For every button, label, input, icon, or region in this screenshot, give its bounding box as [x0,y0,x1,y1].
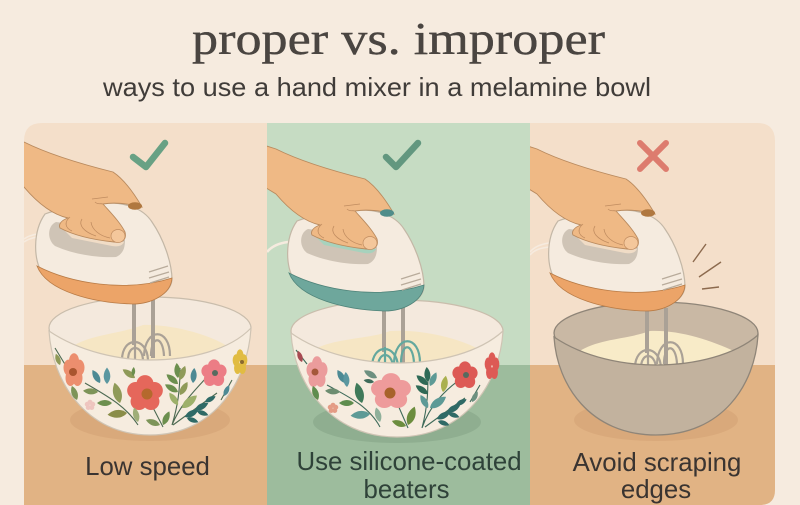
floral decoration [54,348,247,428]
hand [530,146,656,250]
icon: red cross [640,143,666,169]
hand mixer [549,210,685,311]
label: Low speed [85,453,210,481]
floral decoration [296,350,499,429]
label: beaters [363,476,450,504]
bowl: grey [554,302,758,441]
panel: low speed [0,123,267,505]
bowl: floral [291,300,503,443]
vibration marks [693,244,721,289]
cord [267,242,288,252]
title: proper vs. improper [192,13,605,64]
subtitle: ways to use a hand mixer in a melamine bowl [102,72,651,102]
panel: silicone beaters [267,123,530,505]
panel: avoid scraping [530,123,775,505]
label [298,451,520,498]
hand [267,146,395,250]
hand [24,142,143,243]
cord [24,234,37,242]
icon: green check [133,143,165,167]
label: Avoid scraping [573,449,741,477]
icon: green check [386,143,418,167]
label [573,449,741,504]
hand mixer [288,210,424,311]
cord [530,243,549,255]
bowl: floral [49,297,251,441]
label: Use silicone-coated [296,448,522,476]
label: edges [621,476,691,504]
hand mixer [36,203,172,304]
